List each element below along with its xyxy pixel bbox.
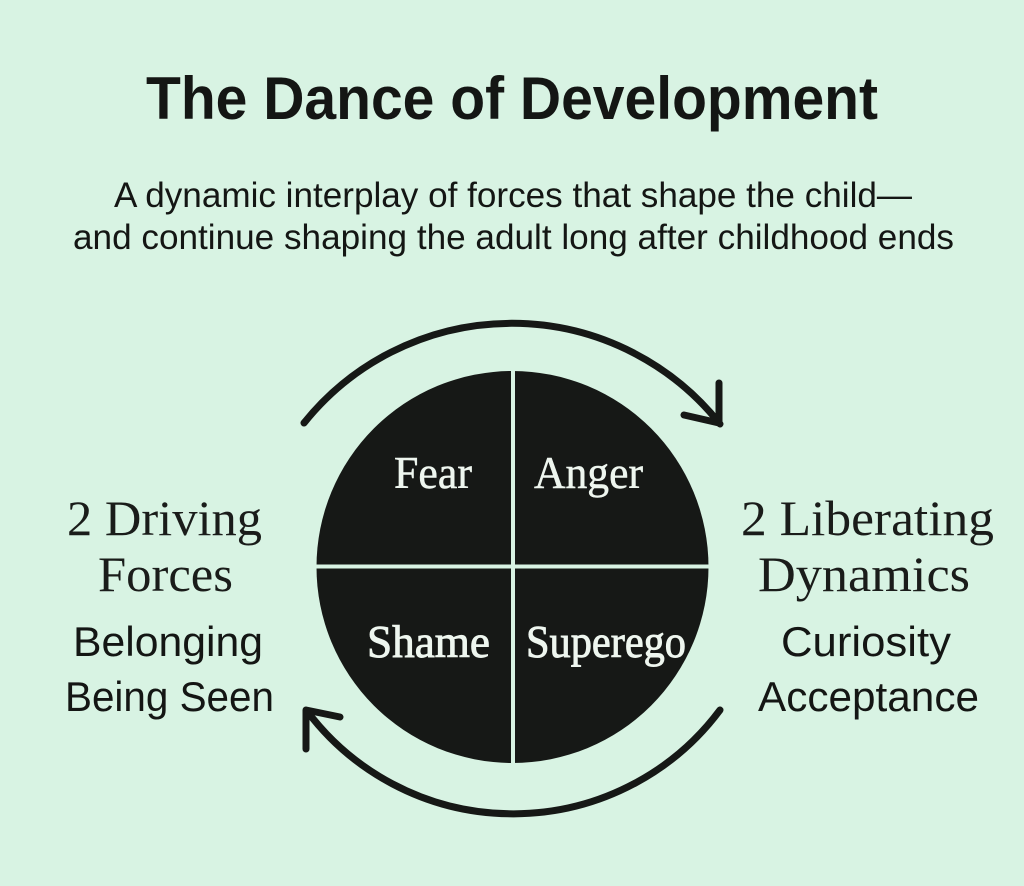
quadrant circle bbox=[315, 369, 711, 765]
top arrow bbox=[304, 323, 720, 424]
right heading: Dynamics bbox=[758, 546, 970, 602]
bottom arrow bbox=[306, 710, 720, 814]
label: Superego: Superego bbox=[526, 616, 686, 667]
left heading: Forces bbox=[98, 546, 233, 602]
subtitle: and continue shaping the adult long after childhood ends bbox=[73, 218, 954, 257]
left items bbox=[65, 618, 274, 720]
left heading: 2 Driving bbox=[67, 490, 262, 546]
left items: Belonging bbox=[73, 618, 263, 665]
label: Shame: Shame bbox=[367, 616, 490, 667]
left panel: 2 driving forces bbox=[65, 490, 274, 720]
left heading bbox=[67, 490, 262, 602]
left items: Being Seen bbox=[65, 673, 274, 720]
subtitle: A dynamic interplay of forces that shape the child— bbox=[114, 176, 912, 215]
right items: Curiosity bbox=[781, 618, 951, 665]
right items: Acceptance bbox=[758, 673, 979, 720]
title: The Dance of Development bbox=[146, 65, 878, 132]
right panel: 2 liberating dynamics bbox=[741, 490, 994, 720]
label: Anger: Anger bbox=[534, 447, 643, 498]
right items bbox=[758, 618, 979, 720]
label: Fear: Fear bbox=[394, 447, 472, 498]
right heading: 2 Liberating bbox=[741, 490, 994, 546]
subtitle bbox=[73, 176, 954, 257]
right heading bbox=[741, 490, 994, 602]
